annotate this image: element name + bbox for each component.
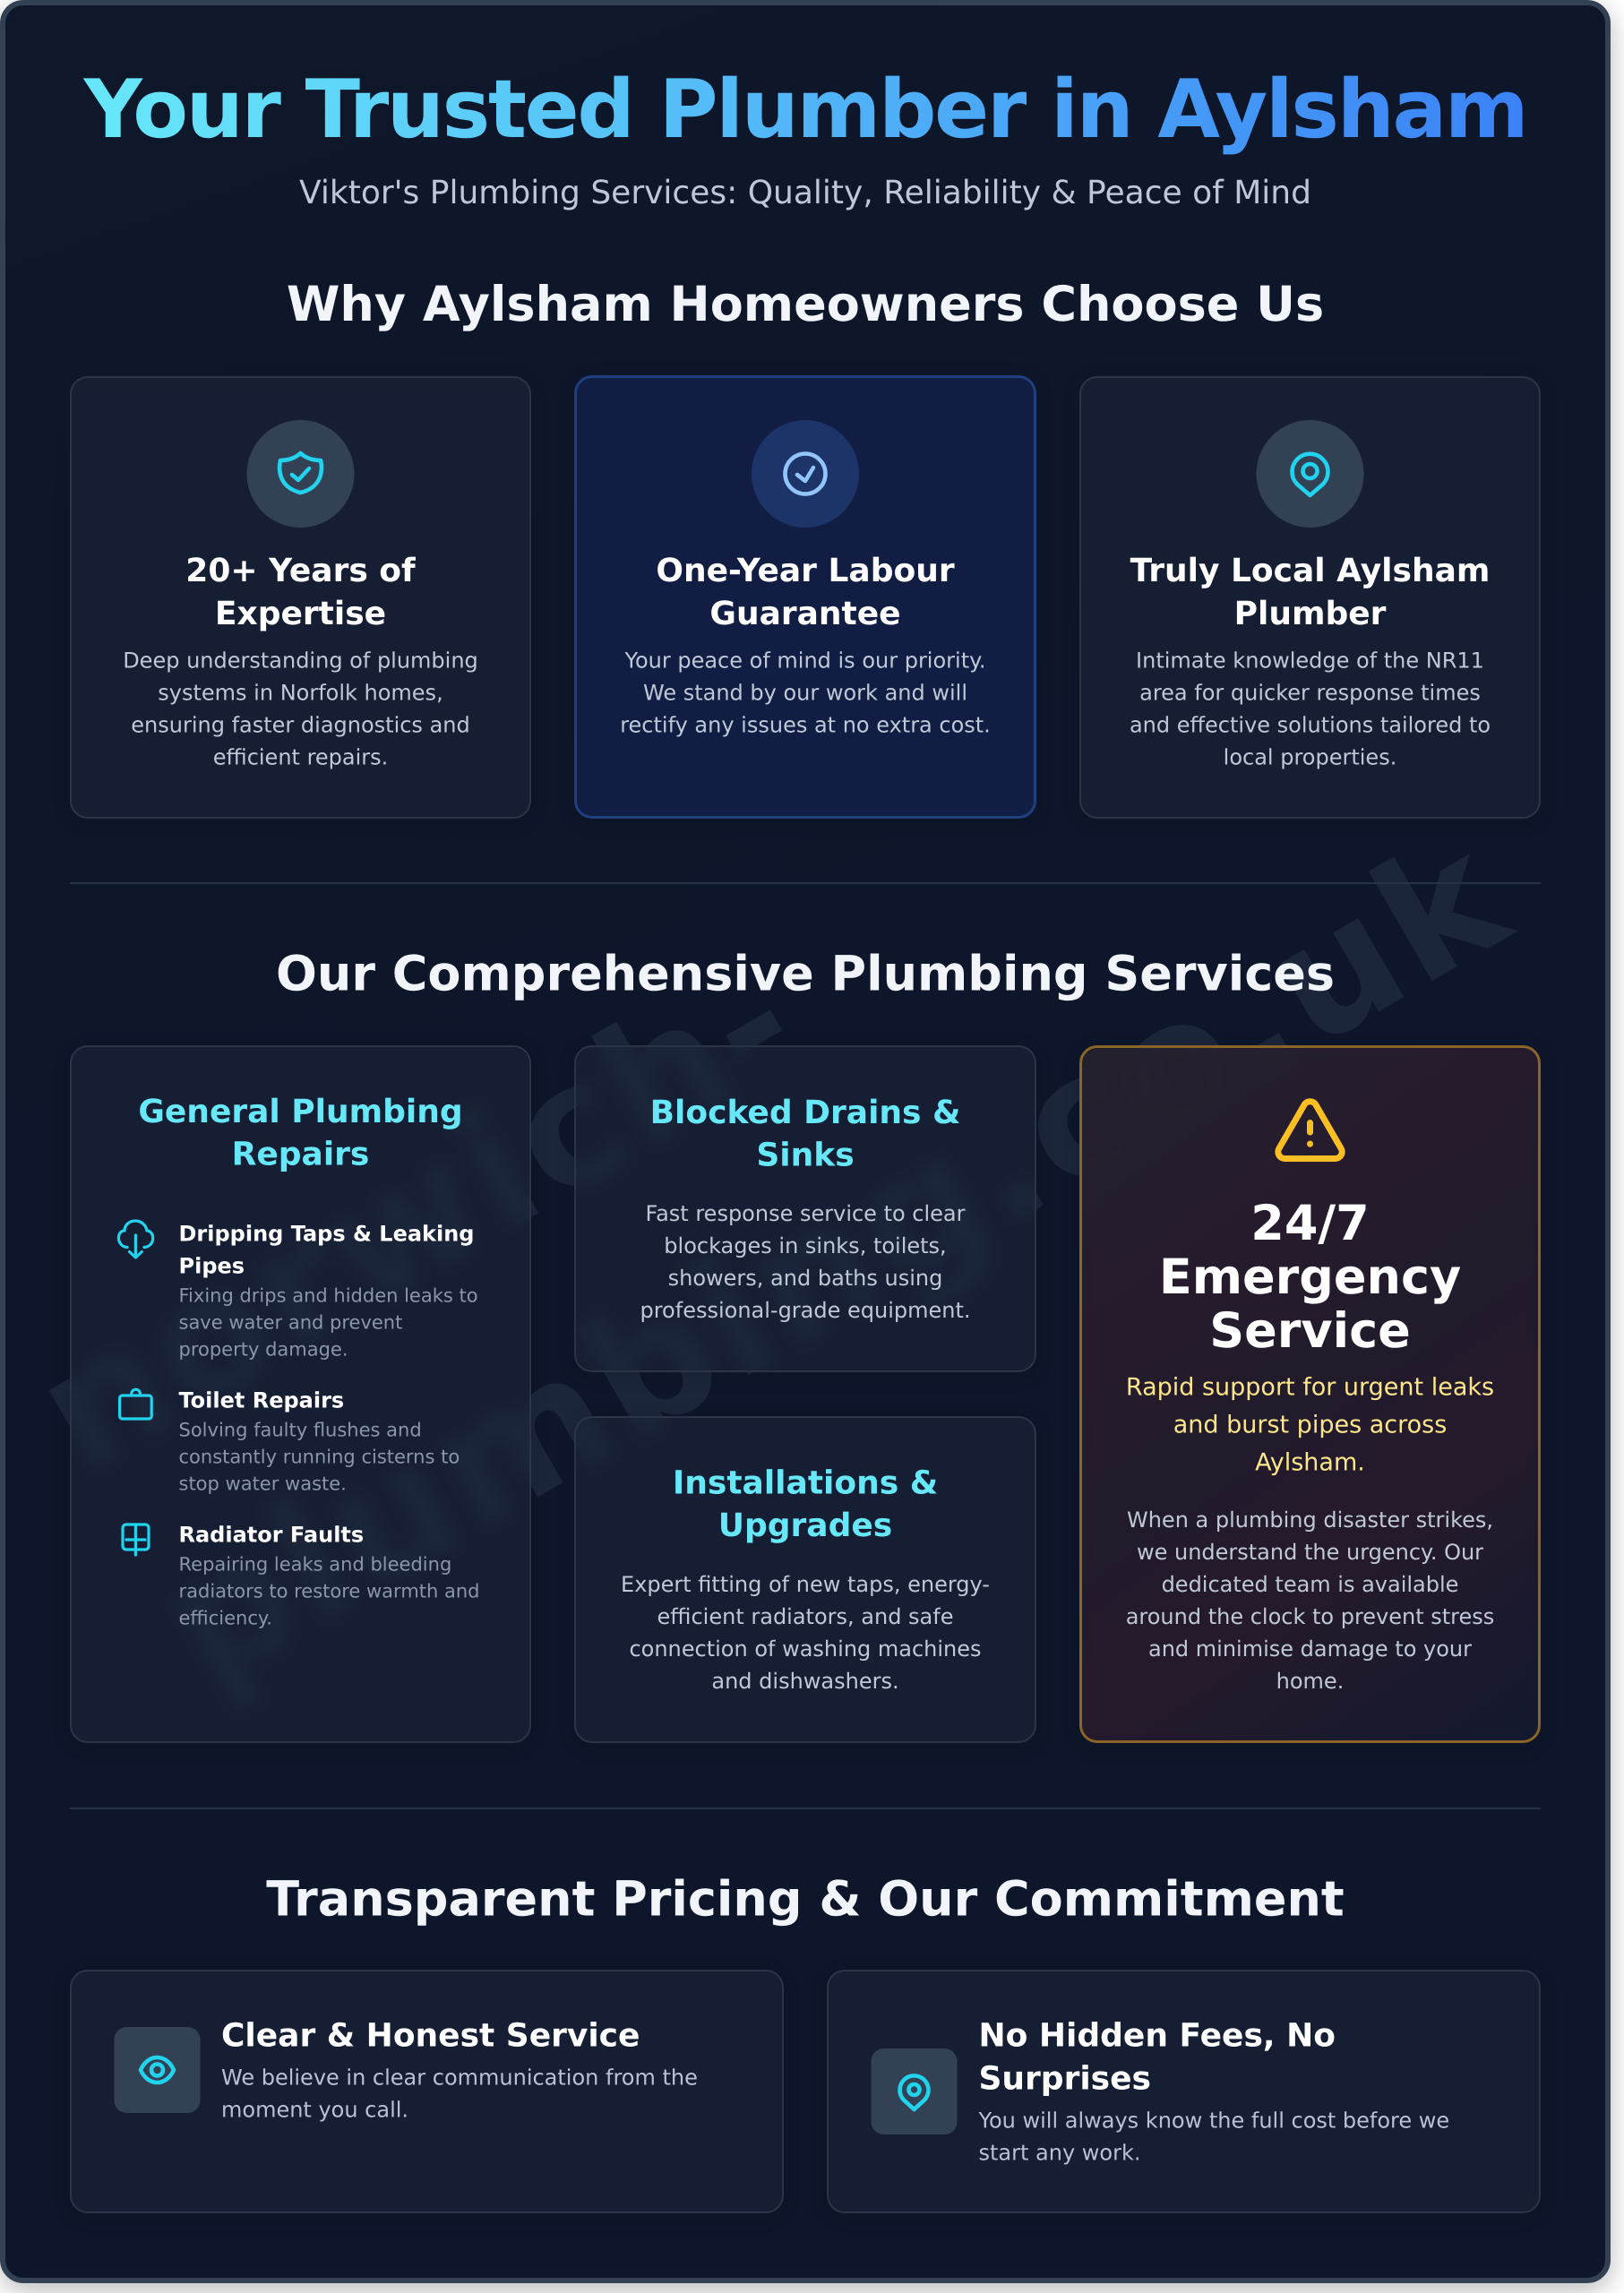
icon: check circle — [752, 420, 859, 528]
card heading: General Plumbing — [138, 1094, 463, 1130]
card heading: Expertise — [215, 596, 386, 632]
card text — [1126, 1507, 1494, 1694]
service item: taps and pipes: save water and prevent — [179, 1311, 402, 1333]
card text: rectify any issues at no extra cost. — [620, 713, 991, 738]
card heading: Plumber — [1234, 596, 1387, 632]
panel: 24/7 emergency service — [1079, 1045, 1541, 1743]
icon: eye — [115, 2027, 201, 2113]
panel: blocked drains and sinks — [574, 1045, 1036, 1372]
card text: and minimise damage to your — [1148, 1636, 1472, 1662]
card text: showers, and baths using — [668, 1266, 942, 1291]
card text: We believe in clear communication from the — [221, 2065, 698, 2091]
card heading: Installations & — [673, 1465, 938, 1501]
title: Your Trusted Plumber in Aylsham — [83, 63, 1526, 157]
service item: radiator faults: Radiator Faults — [179, 1523, 364, 1548]
card heading: One-Year Labour — [656, 553, 955, 589]
card heading — [185, 553, 416, 632]
panel: 20+ years of expertise — [70, 376, 531, 819]
service item: toilet repairs: constantly running cisterns to — [179, 1446, 460, 1467]
card text — [620, 648, 991, 738]
icon: shield check — [247, 420, 355, 528]
card text: Fast response service to clear — [645, 1201, 966, 1226]
icon: map pin — [871, 2048, 957, 2134]
icon: warning triangle — [1278, 1102, 1342, 1159]
service item: radiator faults: efficiency. — [179, 1607, 272, 1628]
card heading: Blocked Drains & — [650, 1095, 960, 1131]
card text: efficient radiators, and safe — [657, 1604, 953, 1629]
card text: ensuring faster diagnostics and — [131, 713, 470, 738]
service item: radiator faults: Repairing leaks and bleeding — [179, 1553, 451, 1575]
card heading — [650, 1095, 960, 1173]
card heading — [1130, 553, 1490, 632]
panel: one-year labour guarantee — [574, 375, 1036, 819]
card text — [621, 1572, 990, 1694]
emergency tagline: and burst pipes across — [1173, 1412, 1447, 1438]
service item: taps and pipes: Fixing drips and hidden leaks to — [179, 1284, 478, 1306]
card text: and dishwashers. — [711, 1669, 899, 1694]
card text: Intimate knowledge of the NR11 — [1136, 648, 1484, 674]
service item: toilet repairs: Solving faulty flushes and — [179, 1419, 422, 1440]
card text: When a plumbing disaster strikes, — [1127, 1507, 1493, 1533]
card text: systems in Norfolk homes, — [158, 681, 443, 706]
emergency tagline: Aylsham. — [1255, 1449, 1365, 1476]
service item: radiator faults: radiators to restore warmth and — [179, 1580, 480, 1602]
card heading — [978, 2017, 1336, 2098]
card text: Expert fitting of new taps, energy- — [621, 1572, 990, 1597]
service item: radiator faults — [123, 1523, 480, 1628]
card heading: Upgrades — [718, 1507, 892, 1544]
card heading: Truly Local Aylsham — [1130, 553, 1490, 589]
card text: start any work. — [978, 2141, 1140, 2166]
watermark: norwich-plumbing.co.uk: norwich- — [5, 921, 831, 1510]
card heading: Repairs — [232, 1136, 369, 1173]
card text — [123, 648, 478, 770]
card text: home. — [1276, 1669, 1344, 1694]
card text: professional-grade equipment. — [640, 1298, 971, 1323]
card text: and effective solutions tailored to — [1130, 713, 1491, 738]
card text — [640, 1201, 971, 1323]
card heading: Clear & Honest Service — [221, 2017, 640, 2055]
card heading: Sinks — [756, 1138, 855, 1173]
service item: taps and pipes: Pipes — [179, 1254, 245, 1279]
panel: clear and honest service — [70, 1970, 784, 2213]
service item: toilet repairs: Toilet Repairs — [179, 1388, 344, 1413]
card heading: Service — [1209, 1302, 1411, 1359]
card text: area for quicker response times — [1139, 681, 1481, 706]
card text: dedicated team is available — [1162, 1572, 1458, 1597]
card text: blockages in sinks, toilets, — [664, 1233, 947, 1258]
panel: truly local plumber — [1079, 376, 1541, 819]
heading: pricing: Transparent Pricing & Our Commitment — [266, 1870, 1345, 1928]
card heading — [656, 553, 955, 632]
card text: Deep understanding of plumbing — [123, 648, 478, 674]
card heading: Emergency — [1159, 1249, 1461, 1305]
card text — [978, 2108, 1449, 2166]
panel: no hidden fees — [827, 1970, 1541, 2213]
service item: toilet repairs: stop water waste. — [179, 1473, 347, 1494]
card text — [221, 2065, 698, 2123]
watermark: norwich-plumbing.co.uk: plumbing.co.uk — [131, 796, 1540, 1722]
card text — [1130, 648, 1491, 770]
heading: why choose us: Why Aylsham Homeowners Choose Us — [287, 276, 1324, 332]
icon: map pin — [1256, 420, 1363, 528]
card heading: Surprises — [978, 2060, 1151, 2098]
card heading: 20+ Years of — [185, 553, 416, 589]
service item: taps and pipes: property damage. — [179, 1338, 348, 1360]
service item: taps and pipes: Dripping Taps & Leaking — [179, 1222, 475, 1247]
card text: we understand the urgency. Our — [1137, 1540, 1483, 1565]
emergency tagline — [1126, 1374, 1494, 1476]
card heading — [138, 1094, 463, 1173]
card text: You will always know the full cost before we — [978, 2108, 1449, 2134]
card text: Your peace of mind is our priority. — [623, 648, 986, 674]
card text: connection of washing machines — [629, 1636, 982, 1662]
service item: taps and pipes — [118, 1221, 478, 1360]
card heading: No Hidden Fees, No — [978, 2017, 1336, 2055]
heading: services: Our Comprehensive Plumbing Services — [276, 946, 1335, 1001]
service item: toilet repairs — [120, 1388, 460, 1494]
emergency tagline: Rapid support for urgent leaks — [1126, 1374, 1494, 1401]
panel: installations and upgrades — [574, 1416, 1036, 1743]
card heading — [1159, 1195, 1461, 1359]
card heading: 24/7 — [1250, 1195, 1370, 1251]
card heading — [673, 1465, 938, 1544]
card text: efficient repairs. — [213, 745, 388, 770]
card heading: Guarantee — [709, 596, 901, 632]
subtitle: Viktor's Plumbing Services: Quality, Reliability & Peace of Mind — [299, 175, 1311, 211]
card text: We stand by our work and will — [643, 681, 967, 706]
card text: around the clock to prevent stress — [1126, 1604, 1494, 1629]
card text: local properties. — [1224, 745, 1396, 770]
card text: moment you call. — [221, 2098, 408, 2123]
panel: general plumbing repairs — [70, 1045, 531, 1743]
